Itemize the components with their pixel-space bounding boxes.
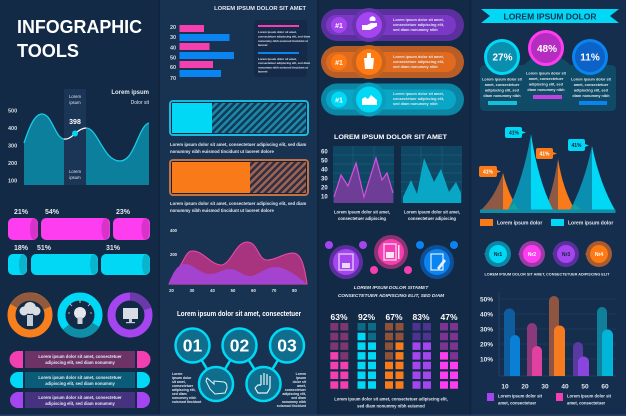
percent matrix: magenta 47%: 47%: [440, 312, 458, 322]
panel: percent circles: 11%: [580, 52, 600, 64]
marker: Nr1: [484, 241, 511, 267]
area chart: main: Lorem ipsum: [111, 90, 149, 96]
text block: orange progress: nonummy nibh euismod tincidunt ut laoreet dolore: [170, 208, 274, 213]
title: INFOGRAPHIC: [17, 17, 142, 37]
text block: matrix caption: sed diam nonummy nibh euismod: [357, 404, 425, 408]
legend: pink: [556, 393, 612, 406]
text block: cyan progress: nonummy nibh euismod tincidunt ut laoreet dolore: [170, 149, 274, 154]
chart: cyan: [401, 146, 462, 203]
panel: percent circles: adipiscing elit, sed: [485, 88, 520, 92]
marker: Nr1: Nr1: [494, 252, 502, 258]
pill: orange: sed diam nonummy nibh: [393, 65, 438, 69]
bar chart: horizontal: [170, 25, 234, 82]
icon: open hand: [255, 373, 270, 393]
area chart: main: [8, 89, 150, 185]
percent matrix: purple 83%: 83%: [412, 312, 430, 322]
cylinder bars: magenta: 23%: [116, 209, 131, 216]
text block: right of steps: euismod tincidunt: [277, 404, 307, 408]
legend: pink: Lorem ipsum dolor sit: [567, 394, 612, 398]
area chart: pink and purple: 20: [169, 288, 174, 293]
percent matrix: orange 67%: [385, 312, 404, 389]
percent matrix: magenta 47%: [440, 312, 458, 389]
text block: marker caption: LOREM IPSUM DOLOR SIT AMET, CONSECTETUER ADIPISCING ELIT: [484, 272, 610, 276]
line charts: axis labels: [321, 150, 328, 200]
panel: percent circles: diam nonummy nibh: [572, 94, 610, 98]
text block: italic caption: [338, 285, 445, 299]
text row: cyan: [10, 372, 150, 388]
bar chart: rounded columns: 60: [601, 384, 609, 390]
line charts: axis labels: 60: [321, 150, 328, 156]
icon: blue document: [416, 241, 458, 279]
legend: peaks: [480, 219, 613, 226]
cylinder bars: magenta: 54%: [45, 209, 60, 216]
text block: orange progress: Lorem ipsum dolor sit amet, consectetuer adipiscing elit, sed diam: [170, 201, 307, 206]
area chart: main: Lorem: [69, 94, 81, 99]
percent matrix: cyan 92%: 92%: [358, 312, 375, 322]
area chart: pink and purple: 400: [170, 228, 178, 233]
bar chart: horizontal: 60: [170, 65, 176, 71]
icon: pink notebook: [370, 235, 412, 274]
text block: left of steps: Lorem: [172, 372, 182, 376]
area chart: main: Lorem: [69, 169, 81, 174]
area chart: main: 398: [69, 119, 81, 126]
text row: purple: Lorem ipsum dolor sit amet, consectetuer: [38, 395, 122, 400]
caption: cyan chart: consectetuer adipiscing: [408, 216, 456, 221]
text block: right of steps: dolor sit: [293, 380, 307, 384]
line charts: axis labels: 20: [321, 186, 328, 192]
text row: pink: Lorem ipsum dolor sit amet, consectetuer: [38, 354, 122, 359]
marker: Nr4: [585, 241, 612, 267]
text block: orange progress: [170, 201, 307, 213]
text block: left of steps: nonummy nibh: [172, 396, 196, 400]
text block: italic caption: LOREM IPSUM DOLOR SITAMET: [354, 285, 429, 291]
legend panel: bar chart notes: consectetuer adipiscing elit, sed diam: [258, 61, 311, 65]
text row: purple: [10, 392, 150, 408]
text block: right of steps: amet,: [297, 384, 306, 388]
bar chart: rounded columns: 40%: [480, 312, 493, 318]
legend panel: bar chart notes: laoreet: [258, 70, 268, 74]
pill: purple: [321, 8, 464, 42]
text row: cyan: adipiscing elit, sed diam nonummy: [45, 381, 115, 386]
text block: right of steps: ipsum: [296, 376, 306, 380]
caption: cyan chart: Lorem ipsum dolor sit amet,: [404, 210, 460, 214]
panel: percent circles: Lorem ipsum dolor sit: [571, 78, 612, 82]
cylinder bars: magenta: [8, 209, 150, 240]
callout: peak 2: 41%: [509, 130, 520, 136]
panel: percent circles: adipiscing elit, sed: [574, 88, 609, 92]
bar chart: rounded columns: 10: [501, 384, 509, 390]
text block: matrix caption: Lorem ipsum dolor sit amet, consectetuer adipiscing elit,: [334, 396, 448, 402]
caption: cyan chart: [404, 210, 460, 221]
legend: peaks: Lorem ipsum dolor: [497, 220, 542, 226]
text block: left of steps: ipsum dolor: [172, 376, 192, 380]
pill: cyan: [321, 82, 464, 116]
chart: purple: [333, 146, 394, 203]
pill: cyan: #1: [335, 98, 343, 104]
marker: Nr2: Nr2: [528, 252, 536, 258]
legend panel: bar chart notes: Lorem ipsum dolor sit amet,: [258, 30, 297, 34]
text block: right of steps: [277, 372, 307, 408]
bar chart: rounded columns: 20%: [480, 342, 493, 348]
chart: peaks: [479, 127, 616, 213]
panel: percent circles: diam nonummy nibh: [483, 94, 521, 98]
pill: orange: consectetuer adipiscing elit,: [393, 60, 444, 64]
area chart: main: Dolor sit: [131, 100, 150, 106]
text row: purple: adipiscing elit, sed diam nonummy: [45, 401, 115, 406]
legend: pink: amet, consectetuer: [567, 400, 606, 406]
legend panel: bar chart notes: Lorem ipsum dolor sit amet,: [258, 57, 297, 61]
pill: cyan: Lorem ipsum dolor sit amet,: [393, 92, 444, 96]
text block: right of steps: nonummy nibh: [282, 400, 306, 404]
area chart: pink and purple: 60: [251, 288, 256, 293]
caption: purple chart: consectetuer adipiscing: [338, 216, 386, 221]
percent matrix: cyan 92%: [358, 312, 376, 389]
cylinder bars: cyan: 18%: [14, 245, 29, 252]
line charts: axis labels: 50: [321, 158, 328, 164]
title: [17, 17, 142, 61]
area chart: pink and purple: [169, 228, 307, 293]
area chart: pink and purple: 40: [210, 288, 215, 293]
pill: cyan: sed diam nonummy nibh: [393, 102, 438, 106]
percent matrix: orange 67%: 67%: [385, 312, 403, 322]
area chart: pink and purple: 80: [292, 288, 297, 293]
pill: purple: Lorem ipsum dolor sit amet,: [393, 18, 444, 22]
bar chart: horizontal: 30: [170, 35, 176, 41]
step diagram: [176, 328, 304, 401]
bar chart: rounded columns: 30%: [480, 326, 493, 334]
area chart: pink and purple: 200: [170, 252, 178, 257]
text block: left of steps: consectetuer: [172, 384, 194, 388]
area chart: main: 300: [8, 144, 17, 150]
text row: pink: [10, 351, 151, 368]
step diagram: 02: [230, 336, 249, 356]
pill: orange: [321, 45, 464, 79]
text block: italic caption: CONSECTETUER ADIPISCING ELIT, SED DIAM: [338, 293, 445, 299]
cylinder bars: cyan: 51%: [37, 245, 52, 252]
callout: peak 3: 41%: [539, 152, 550, 158]
step diagram: 01: [183, 336, 202, 356]
bar chart: horizontal: 50: [170, 56, 176, 62]
line charts: axis labels: 40: [321, 168, 328, 174]
caption: purple chart: Lorem ipsum dolor sit amet,: [334, 210, 390, 214]
panel: percent circles: amet, consectetuer: [574, 83, 609, 87]
panel: percent circles: 48%: [537, 44, 557, 55]
step diagram: 03: [277, 336, 297, 356]
donut: monitor icon: [112, 296, 148, 334]
text block: matrix caption: [334, 396, 448, 408]
area chart: main: 100: [8, 178, 17, 184]
heading: column 3: LOREM IPSUM DOLOR SIT AMET: [334, 134, 448, 141]
bar chart: rounded columns: [480, 292, 616, 390]
percent matrix: pink 63%: 63%: [330, 312, 348, 322]
legend: peaks: Lorem ipsum dolor: [568, 220, 613, 226]
marker: Nr3: [552, 241, 579, 267]
bar chart: rounded columns: 30: [541, 384, 549, 390]
banner: [481, 9, 619, 23]
panel: percent circles: Lorem ipsum dolor sit: [482, 78, 523, 82]
text block: right of steps: adipiscing elit,: [282, 392, 306, 396]
panel: percent circles: [480, 32, 616, 111]
marker: Nr2: [518, 241, 545, 267]
icon: pointing hand: [206, 378, 227, 394]
cylinder bars: cyan: [8, 245, 150, 275]
text block: right of steps: Lorem: [296, 372, 306, 376]
text block: cyan progress: [170, 142, 307, 154]
pill: purple: #1: [335, 23, 343, 30]
text block: left of steps: adipiscing elit,: [172, 388, 196, 392]
area chart: pink and purple: 30: [190, 288, 195, 293]
pill: purple: consectetuer adipiscing elit,: [393, 23, 444, 27]
line charts: axis labels: 30: [321, 176, 328, 182]
text block: left of steps: euismod tincidunt: [172, 400, 202, 404]
text block: left of steps: sit amet,: [172, 380, 186, 384]
legend panel: bar chart notes: nonummy nibh euismod tincidunt ut: [258, 66, 308, 70]
cylinder bars: magenta: 21%: [14, 209, 29, 216]
caption: purple chart: [334, 210, 390, 221]
bar chart: rounded columns: 40: [561, 384, 569, 390]
bar chart: rounded columns: 10%: [480, 356, 493, 364]
bar chart: rounded columns: 50: [581, 384, 589, 390]
bar chart: horizontal: 20: [170, 25, 176, 31]
bar chart: rounded columns: 50%: [480, 296, 493, 304]
progress bar: cyan: [170, 101, 308, 135]
panel: percent circles: 27%: [492, 52, 513, 64]
panel: percent circles: amet, consectetuer: [529, 77, 564, 81]
area chart: main: ipsum: [69, 175, 81, 180]
heading: steps: Lorem ipsum dolor sit amet, consectetuer: [177, 311, 301, 318]
area chart: main: 500: [8, 108, 17, 114]
icon: purple notebook: [325, 241, 367, 279]
area chart: pink and purple: 50: [231, 288, 236, 293]
panel: percent circles: amet, consectetuer: [485, 83, 520, 87]
marker: Nr4: Nr4: [595, 252, 603, 258]
legend: purple: Lorem ipsum dolor sit: [498, 394, 543, 398]
donut: cloud icon: [12, 296, 48, 334]
area chart: main: 400: [8, 126, 17, 132]
bar chart: horizontal: 40: [170, 46, 176, 52]
title: TOOLS: [17, 41, 79, 61]
callout: peak 4: 41%: [571, 143, 582, 149]
marker: Nr3: Nr3: [562, 252, 570, 258]
text block: right of steps: consectetuer: [285, 388, 307, 392]
bar chart: rounded columns: 20: [521, 384, 529, 390]
pill: orange: Lorem ipsum dolor sit amet,: [393, 55, 444, 59]
percent matrix: purple 83%: [412, 312, 431, 389]
line charts: axis labels: 10: [321, 194, 328, 200]
percent matrix: pink 63%: [330, 312, 348, 389]
callout: peak 1: 41%: [483, 170, 494, 176]
legend: purple: amet, consectetuer: [498, 400, 537, 406]
banner: LOREM IPSUM DOLOR: [504, 12, 597, 22]
cylinder bars: cyan: 31%: [106, 245, 121, 252]
legend panel: bar chart notes: laoreet: [258, 43, 268, 47]
bar chart: horizontal: 70: [170, 76, 176, 82]
panel: percent circles: diam nonummy nibh: [527, 88, 565, 92]
text row: cyan: Lorem ipsum dolor sit amet, consectetuer: [38, 375, 122, 380]
panel: percent circles: adipiscing elit, sed: [529, 82, 564, 86]
area chart: main: ipsum: [69, 100, 81, 105]
progress bar: orange: [170, 160, 308, 195]
pill: cyan: consectetuer adipiscing elit,: [393, 97, 444, 101]
text block: cyan progress: Lorem ipsum dolor sit amet, consectetuer adipiscing elit, sed diam: [170, 142, 307, 147]
legend panel: bar chart notes: nonummy nibh euismod tincidunt ut: [258, 39, 308, 43]
legend panel: bar chart notes: consectetuer adipiscing elit, sed diam: [258, 34, 311, 38]
legend: purple: [487, 393, 543, 406]
panel: percent circles: Lorem ipsum dolor sit: [526, 72, 567, 76]
donut: light bulb icon: [62, 296, 98, 334]
area chart: main: 200: [8, 161, 17, 167]
legend panel: bar chart notes: [254, 20, 311, 77]
pill: purple: sed diam nonummy nibh: [393, 28, 438, 32]
pill: orange: #1: [335, 60, 343, 67]
text block: left of steps: sed diam: [172, 392, 187, 396]
heading: column 2: LOREM IPSUM DOLOR SIT AMET: [214, 6, 306, 12]
text row: pink: adipiscing elit, sed diam nonummy: [45, 360, 115, 365]
text block: right of steps: sed diam: [291, 396, 306, 400]
area chart: pink and purple: 70: [272, 288, 277, 293]
text block: left of steps: [172, 372, 202, 404]
